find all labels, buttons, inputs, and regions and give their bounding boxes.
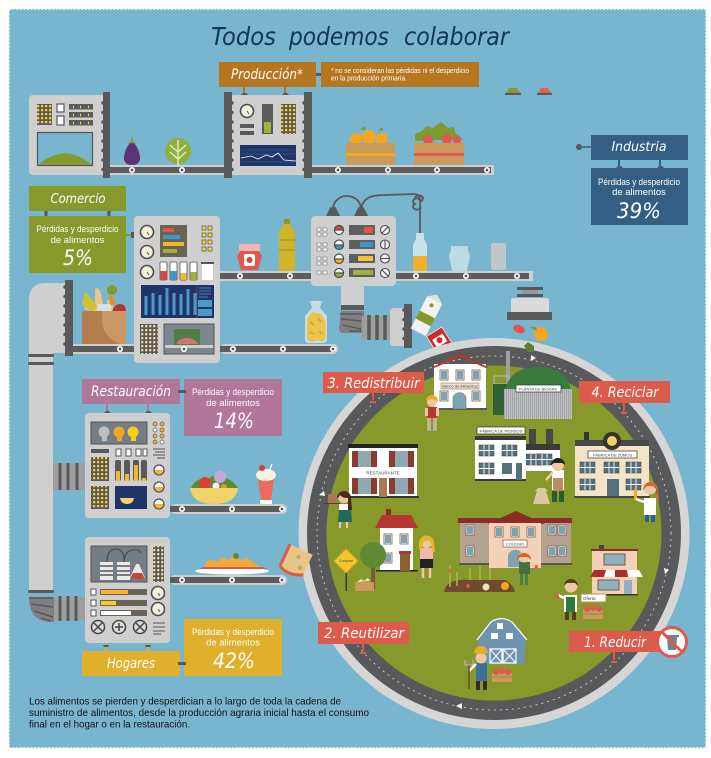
machine: field xyxy=(29,92,110,178)
building: fábrica de piensos xyxy=(475,427,560,481)
machine: industry controls xyxy=(311,216,396,308)
note: producción primaria: * no se consideran las pérdidas ni el desperdicio xyxy=(331,68,469,75)
panel: restauración: Pérdidas y desperdicio xyxy=(192,387,274,398)
person: farmer xyxy=(465,646,492,690)
panel: hogares: 42% xyxy=(213,649,255,673)
label: 2. Reutilizar: 2. Reutilizar xyxy=(324,626,405,642)
title xyxy=(211,22,511,51)
label: 2. Reutilizar xyxy=(318,622,409,653)
conveyor: comercio line xyxy=(73,344,338,354)
icon: hose and coil xyxy=(327,194,423,233)
panel: hogares: Pérdidas y desperdicio xyxy=(192,627,274,638)
label: 3. Redistribuir xyxy=(323,372,424,402)
label: 1. Reducir: 1. Reducir xyxy=(584,635,647,651)
icon: lettuce xyxy=(165,138,191,165)
label: 3. Redistribuir: 3. Redistribuir xyxy=(328,376,421,392)
icon: salad bowl xyxy=(190,471,238,504)
vegetable patch xyxy=(444,565,515,592)
panel: hogares: Hogares xyxy=(107,656,155,672)
icon: cheese xyxy=(279,544,313,579)
icon: can xyxy=(491,243,506,270)
conveyor: restaurant line xyxy=(170,504,287,514)
building: planta de biogas xyxy=(493,351,572,419)
note: producción primaria xyxy=(321,62,479,87)
title: podemos xyxy=(288,22,389,51)
label: 4. Reciclar: 4. Reciclar xyxy=(592,385,660,401)
building: fábrica de zumos xyxy=(574,432,650,498)
icon: bottle xyxy=(413,233,427,272)
machine: comercio xyxy=(134,216,220,363)
road sign xyxy=(334,549,358,591)
panel: industria xyxy=(576,135,688,225)
text block: footer: final en el hogar o en la restauración. xyxy=(29,718,190,730)
person: waitress xyxy=(324,491,352,528)
conveyor: top line xyxy=(110,165,494,175)
pipe: main vertical xyxy=(28,280,85,592)
icon: falling leaf xyxy=(524,342,534,352)
icon: milk carton xyxy=(411,291,445,336)
panel: hogares: de alimentos xyxy=(206,638,260,648)
crate: farmer tomatoes xyxy=(492,668,512,682)
machine: household xyxy=(85,537,170,643)
conveyor: household line xyxy=(170,575,287,585)
icon: milkshake xyxy=(256,464,276,504)
machine: production monitor xyxy=(224,92,312,178)
icon: oil bottle xyxy=(279,219,295,271)
label: 1. Reducir xyxy=(569,631,661,662)
icon: eggplant xyxy=(124,136,140,165)
icon: no trash xyxy=(658,628,686,656)
building: shop xyxy=(590,545,643,596)
machine: press xyxy=(507,287,552,320)
panel: comercio: Comercio xyxy=(50,191,106,207)
building: banco de alimentos: Banco de Alimentos xyxy=(442,384,478,388)
panel: restauración: Restauración xyxy=(91,384,171,400)
crate and sale sign: Oferta xyxy=(583,596,596,601)
crate and sale sign xyxy=(581,594,606,619)
icon: tomato crate xyxy=(414,122,464,165)
person: scientist xyxy=(634,482,659,522)
pipe: elbow xyxy=(28,590,85,622)
panel: restauración: 14% xyxy=(214,409,254,433)
icon: jam jar xyxy=(237,244,262,270)
title: colaborar xyxy=(404,22,511,51)
building: banco de alimentos xyxy=(432,354,488,410)
icon: green and red buttons xyxy=(505,88,552,95)
person: feed seller xyxy=(533,458,565,504)
conveyor: industry line xyxy=(220,271,533,281)
building: fábrica de zumos: FÁBRICA DE ZUMOS xyxy=(593,452,632,457)
pipe: carton outlet xyxy=(339,304,412,348)
panel: hogares xyxy=(82,619,282,676)
panel: industria: Industria xyxy=(612,139,666,155)
text block: footer xyxy=(29,696,369,730)
panel: producción label xyxy=(219,62,322,95)
panel: producción label: Producción* xyxy=(231,67,303,83)
icon: grocery bag xyxy=(82,285,126,344)
building: barn xyxy=(477,618,527,664)
icon: jar xyxy=(449,246,470,271)
person: greengrocer xyxy=(555,579,578,620)
panel: comercio: de alimentos xyxy=(51,235,105,246)
person: gardener girl xyxy=(517,552,538,585)
panel: comercio: 5% xyxy=(63,246,93,270)
road sign: Compost xyxy=(339,559,353,563)
icon: orange crate xyxy=(346,126,395,165)
building: colegio xyxy=(458,511,572,568)
panel: comercio: Pérdidas y desperdicio xyxy=(36,224,118,235)
person: volunteer xyxy=(425,395,439,431)
panel: comercio xyxy=(29,186,134,273)
text block: footer: Los alimentos se pierden y desperdician a lo largo de toda la cadena de xyxy=(29,696,341,708)
title: Todos xyxy=(211,22,276,51)
person: blonde woman xyxy=(419,536,435,578)
icon: falling tomato xyxy=(512,323,526,335)
machine: restaurant xyxy=(85,413,170,518)
panel: restauración xyxy=(82,379,282,436)
building: colegio: COLEGIO xyxy=(506,541,524,546)
icon: falling orange xyxy=(529,327,548,341)
building: restaurante: RESTAURANTE xyxy=(366,470,400,476)
building: house xyxy=(375,509,418,572)
label: 4. Reciclar xyxy=(579,381,670,413)
text block: footer: suministro de alimentos, desde la producción agraria inicial hasta el consumo xyxy=(29,707,369,719)
tree and compost crate xyxy=(355,542,386,591)
panel: restauración: de alimentos xyxy=(206,398,260,409)
icon: pasta bag xyxy=(305,301,327,343)
panel: industria: de alimentos xyxy=(612,187,666,198)
panel: industria: Pérdidas y desperdicio xyxy=(598,177,680,188)
icon: tomato can xyxy=(427,327,453,354)
panel: industria: 39% xyxy=(617,199,661,223)
note: producción primaria: en la producción primaria. xyxy=(331,76,407,82)
building: planta de biogas: PLANTA DE BIOGÁS xyxy=(519,386,557,391)
building: fábrica de piensos: FÁBRICA DE PIENSOS xyxy=(480,428,523,433)
icon: nachos plate xyxy=(195,553,269,574)
recycling circle xyxy=(298,338,690,729)
building: restaurante xyxy=(348,444,419,498)
